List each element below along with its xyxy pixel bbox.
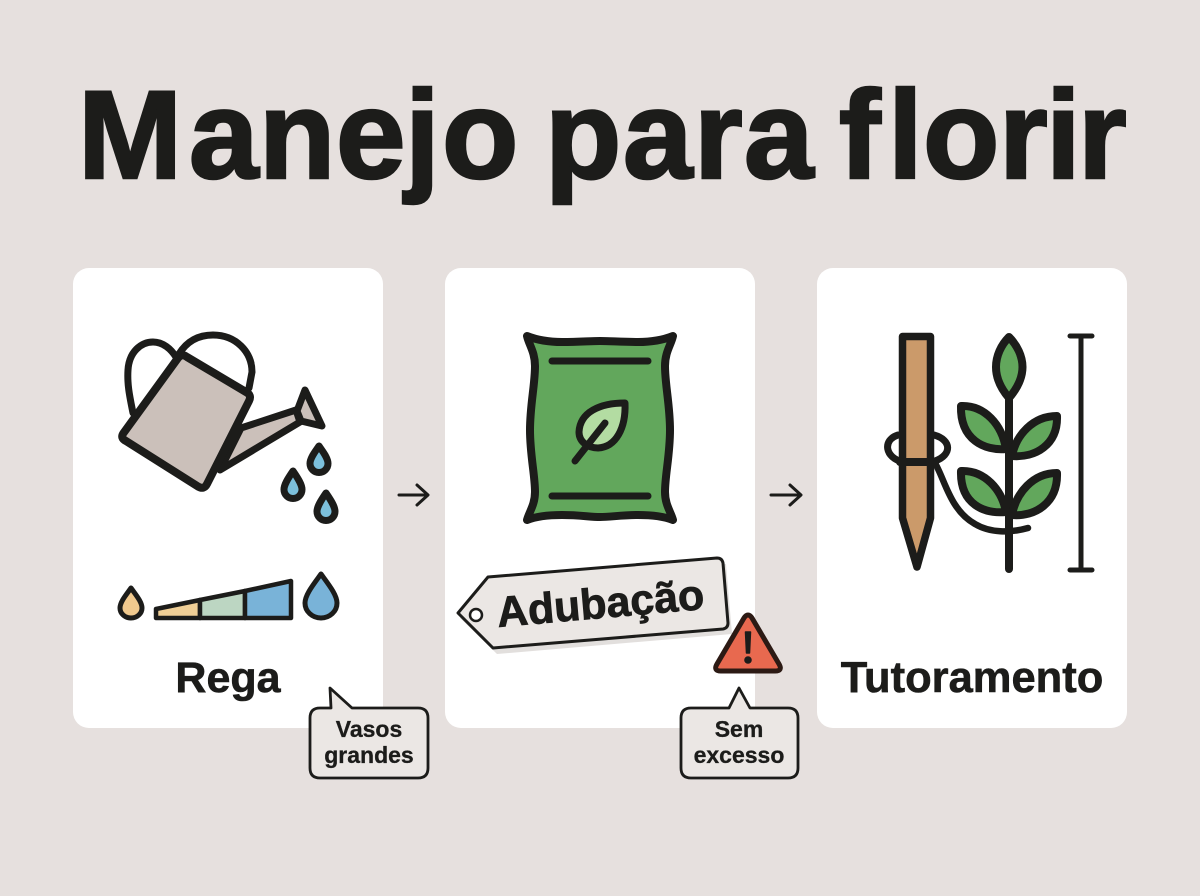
icon: height bar — [1070, 336, 1092, 570]
icon: watering can — [122, 335, 322, 488]
callout: vasos grandes: grandes — [324, 742, 414, 768]
callout: vasos grandes: Vasos — [336, 716, 402, 742]
callout: sem excesso: excesso — [694, 742, 784, 768]
label: rega: Rega — [175, 654, 282, 702]
panel: rega — [73, 268, 383, 728]
arrow 2 — [771, 485, 801, 505]
icon: stake with tie — [888, 336, 1028, 567]
icon: warning — [716, 615, 780, 671]
label: tutoramento: Tutoramento — [841, 654, 1103, 702]
callout: sem excesso: Sem — [715, 716, 763, 742]
label tag: adubacao — [458, 558, 732, 654]
icon: water drops — [284, 446, 335, 520]
panel: adubacao — [445, 268, 755, 728]
panel: tutoramento — [817, 268, 1127, 728]
title: Manejo para florir — [78, 66, 1127, 205]
icon: fertilizer bag — [527, 336, 673, 520]
chart: watering scale — [120, 574, 337, 618]
callout: sem excesso — [681, 688, 798, 778]
label tag: adubacao: Adubação — [495, 571, 706, 637]
arrow 1 — [399, 485, 428, 505]
icon: plant — [961, 337, 1057, 569]
callout: vasos grandes — [310, 688, 428, 778]
